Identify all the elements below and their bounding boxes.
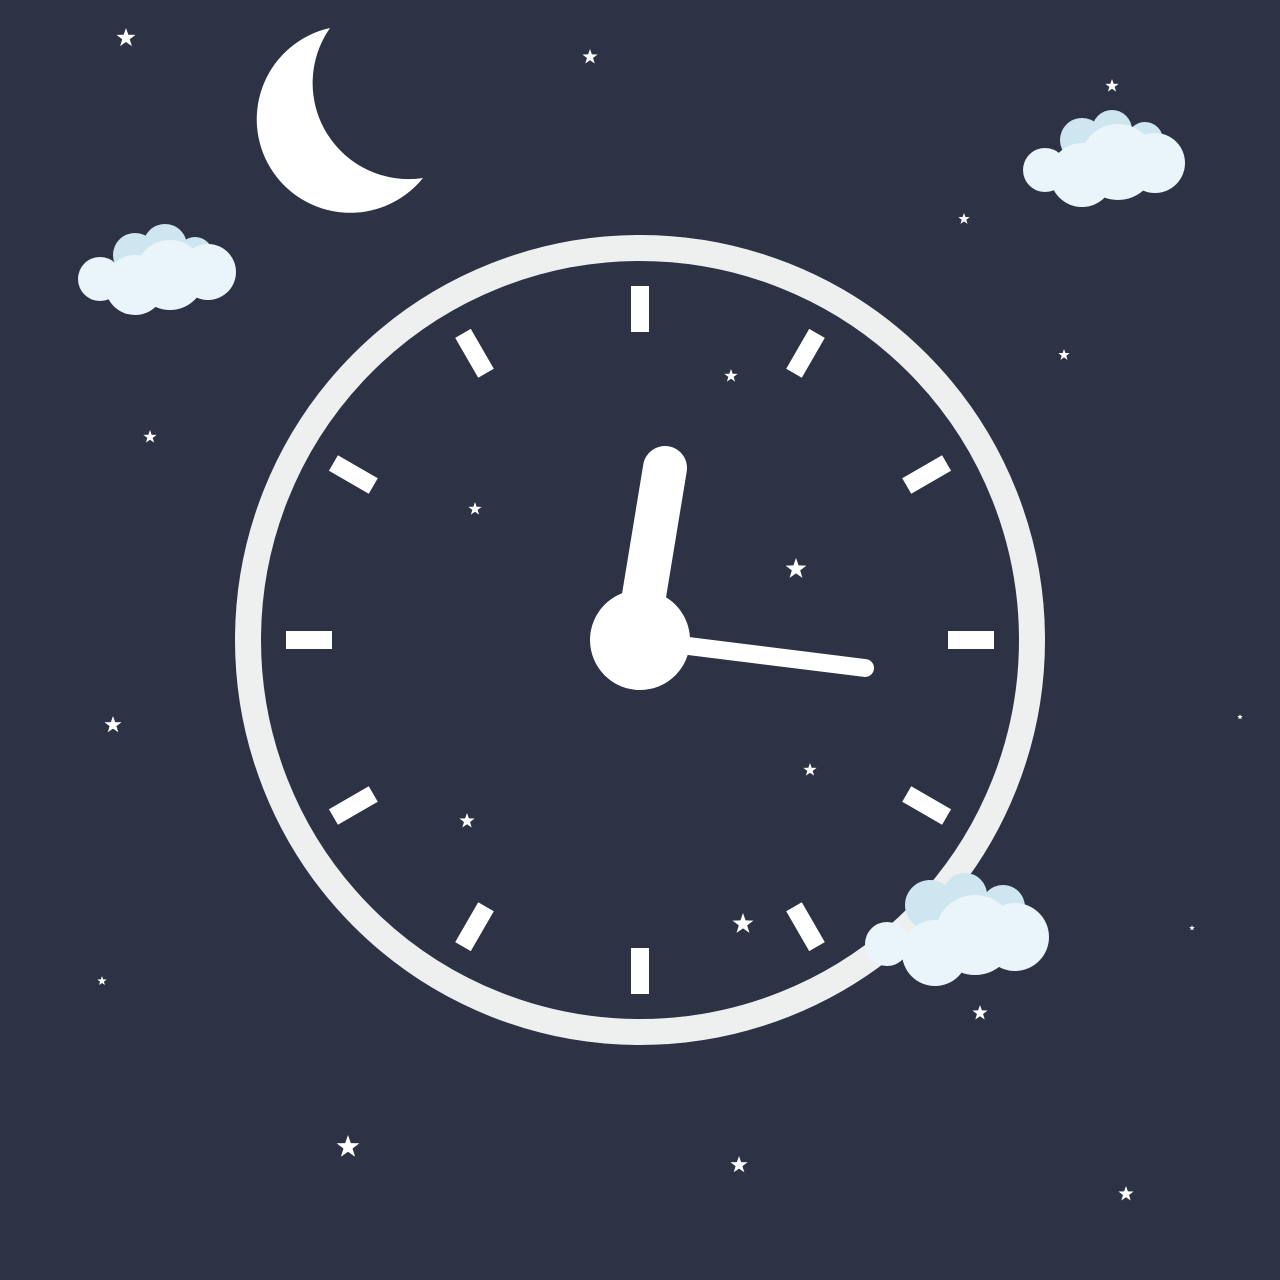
cloud: top right (1023, 110, 1185, 207)
icon: moon (257, 28, 423, 213)
clock: tick marks (286, 286, 994, 994)
cloud: bottom right over ring (865, 873, 1049, 986)
clock: hands (590, 468, 865, 690)
clock: ring (248, 248, 1032, 1032)
cloud: top left (78, 224, 236, 315)
